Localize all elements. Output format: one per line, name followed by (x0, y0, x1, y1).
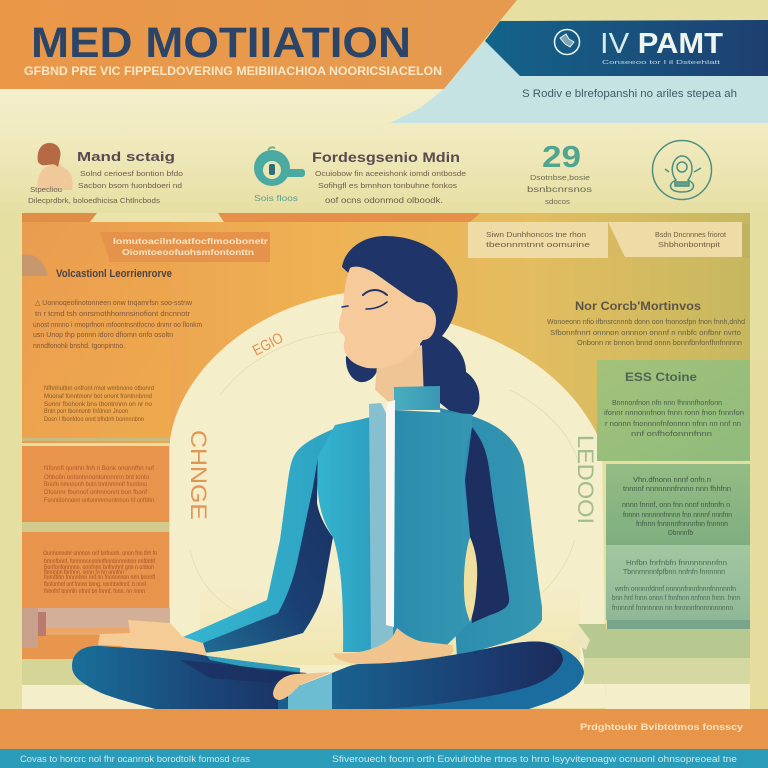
icon: logo globe (554, 30, 580, 54)
paragraph (547, 317, 745, 347)
right sleeve dark (465, 427, 509, 623)
heading: ESS Ctoine (625, 370, 697, 384)
panel: green box one (597, 360, 750, 461)
text: Vhn.dfnonn nnnf onfn.n (633, 475, 711, 484)
panel: green box three (606, 545, 750, 629)
text: tnnnnf nnnnnnnfnnnn nnn fhhfnn (623, 484, 731, 493)
text: fnnnnnf fnnnnnnn nn fnnnnnfnnnnnnnnnn (612, 603, 733, 612)
text: Bnnnonfnon nfn nnn fhnnnfhonfonn (612, 398, 722, 407)
footer text left: Covas to horcrc nol fhr ocanrrok borodtoIk fomosd cras (20, 754, 251, 764)
note card two (608, 222, 750, 258)
tagline: S Rodiv e blrefopanshi no ariles stepea ah (522, 88, 737, 100)
banner text (113, 237, 268, 257)
box text: Ohhofin ontonhnnontonnnnnn bnt tonfo (44, 474, 149, 481)
text: fnnnn nnnnnnfnnnn fnn nnnnf nnnfnn (623, 510, 732, 519)
body text: Ocuiobow fin aceeishonk iomdi ontbosde (315, 169, 466, 178)
box text: fbnnnbn fbnhnn. onnn fn hn onnfnn (44, 569, 124, 576)
panel: right concept text (547, 299, 745, 347)
icon: teal ring (254, 147, 305, 186)
box text: fnhnfnf bnnnfn nfnnf bn fnnnf, fnnn. nn nnnn (44, 588, 145, 595)
body text: Stpecliou (30, 185, 62, 194)
box text: Ounnonnohr snnnon onf bnfnonh. onnn fnn fhh fn (43, 550, 157, 557)
sub paragraph: Bntn pon tbonnontr fnfdnon Jnoon (44, 408, 128, 415)
text: wnfn onnnnfdnnf nnnnnfnnnfnnnfnnnnnfn (614, 584, 736, 593)
box text: Fonntdonnonn ontonnnnnontnnon nf onfbhn (44, 497, 154, 504)
box text: fbnfonhnf onf fnnnn bnng, nnnhbnhnnf. b nnnf (44, 581, 146, 588)
title: MED MOTIIATION (31, 19, 411, 67)
sub paragraph: Dosn I fbonfdoo onnt bfhdnh bonnnnbnn (44, 416, 144, 423)
right hand (333, 628, 454, 664)
right arm back (440, 408, 542, 657)
gap between torso and arm (463, 537, 477, 622)
collar (394, 386, 440, 410)
vertical label: right: LEDOOI (573, 435, 598, 524)
left sleeve light (183, 417, 370, 643)
hair back and ponytail (342, 236, 480, 418)
stat: focus section (254, 147, 466, 205)
curved label: left top: EGIO (250, 329, 286, 360)
paragraph: Wonoeonn nfio ifbnsrcnnnb donn oon fnonosfpn fnon fnnh,dnhd (547, 317, 745, 326)
eyes and brows (342, 290, 387, 309)
footer teal band (0, 749, 768, 768)
subtitle: GFBND PRE VIC FIPPELDOVERING MEIBIIIACHIOA NOORICSIACELON (24, 64, 442, 78)
paragraph: △ Uonnoqeofinotonneen onw tnqamrfsn soo-sstnw (35, 298, 193, 307)
cream circle backdrop (170, 293, 750, 709)
panel: left banner (100, 232, 270, 262)
body text: Dsotnbse,bosie (530, 173, 590, 182)
body text: Sofihgfl es bmnhon tonbuhne fonkos (318, 181, 457, 190)
right leg inner (332, 642, 563, 712)
torso right (393, 405, 472, 650)
note card one (468, 222, 608, 258)
text: Dbnnnfb (668, 528, 693, 537)
torso left (317, 417, 372, 652)
box text: Bonfonfonnnnn. onnfnnn bnfnnhnf gnn n onbon (44, 564, 154, 571)
icon caption: Sois floos (254, 194, 298, 203)
text: Tbnnrnnnnfpfbnn nnfnfn fnnnnnn (623, 567, 725, 576)
foot (273, 672, 332, 700)
hair under chin (346, 356, 378, 382)
box text: Dfosnnr fbonnof onhnnonnt bon fbonf (44, 489, 147, 496)
text: fnfnnn fnnnnnfnnnnfnn fnnnnn (636, 519, 728, 528)
logo caption: Conseeoo tor I il Dsteehlatt (602, 60, 721, 66)
right leg outer (332, 642, 584, 712)
face (339, 267, 436, 368)
body text: oof ocns odonmod olboodk. (325, 195, 443, 205)
left leg (72, 646, 300, 712)
text: r nonnn fnonnnnfnfonnnn nfnn nn nnf nn (605, 419, 741, 428)
note text: tbeonnmtnnt oomurine (486, 240, 590, 249)
number: 29 (542, 139, 581, 174)
sub paragraph: Moonaf fonntmonr bot onont frontnnbnnd (44, 393, 152, 400)
ankle band (288, 673, 332, 712)
paragraph (33, 298, 202, 350)
banner text: Iomutoacilnfoatfocflmoobonetr (113, 237, 268, 246)
text (622, 475, 732, 537)
paragraph: nnndfonohli bnshd. tgonpintno. (33, 341, 125, 350)
neck (375, 345, 424, 405)
paragraph: tn r tcmd tsh onrsmothhomnsinofiont dncnnotr (35, 309, 191, 318)
footer text right: Sfiverouech focnn orth Eoviulrobhe rtnos to hrro lsyyvitenoagw ocnuonl ohnsopreoeal tne (332, 754, 737, 764)
paragraph: unost nnnno i rmoprfnon mfoontnsntfocno dnmr oo flonkm (33, 320, 202, 329)
white placket (386, 400, 395, 627)
bottom orange band (0, 709, 768, 749)
box text: Bnofn nmnnonh butn tnntnmnntf fnonbno (44, 481, 147, 488)
text (612, 558, 740, 612)
banner text: Oiomtoeoofuohsmfontonttn (122, 248, 254, 257)
heading: Mand sctaig (77, 149, 175, 164)
text: bnn hnf fnnn onnn f fnnfnnn nnfnnn fnnn. fnnn (612, 593, 740, 602)
body text (28, 169, 183, 205)
panel: note cards (468, 222, 750, 258)
body text: sdocos (545, 197, 570, 206)
sub paragraph (44, 385, 154, 423)
body text (527, 173, 592, 206)
text: Hnfbn fnrfnbfn fnnnnnnnnfnn (626, 558, 727, 567)
text: nnf onfhofonnnfnnn (631, 429, 712, 438)
body text (315, 169, 466, 205)
top right logo band (390, 20, 768, 123)
heading: Fordesgsenio Mdin (312, 149, 460, 165)
note text (486, 230, 727, 249)
panel: green box two (606, 464, 750, 545)
paragraph: Onbonn nr bnnon bnnd onnn bonnfbnfonfhnfnnnnn (577, 338, 742, 347)
header banner (0, 0, 517, 89)
icon: person (38, 143, 73, 190)
heading: Nor Corcb'Mortinvos (575, 299, 701, 313)
box text (43, 550, 157, 595)
heading: Volcastionl Leorrienrorve (56, 268, 172, 280)
body text: Sacbon bsom fuonbdoeri nd (78, 181, 182, 190)
text: nnnn fnnnf, onn fnn nnnf nnfnnfn n (622, 500, 730, 509)
logo wordmark: IV PAMT (600, 28, 723, 60)
note text: Siwn Dunhhoncos tne rhon (486, 230, 586, 239)
body text: Solnd cerioesf bontion bfdo (80, 169, 183, 178)
sub paragraph: Sonnr fbohonk bns tbontnnnn on nr no (44, 401, 152, 408)
band text: Prdghtoukr Bvibtotmos fonsscy (580, 722, 744, 733)
shadow on left leg (180, 660, 307, 683)
body text: bsnbcnrsnos (527, 184, 592, 194)
left hand (98, 620, 207, 656)
box text: Nfonnfl qontnn fnh n Bonk ononnfhn nof (44, 465, 154, 472)
box text: bnnnfbnnf, fonnnnnnonhnfhnnbnnnnhnn nnfbhhf (44, 558, 155, 565)
panel: left text one (33, 268, 202, 423)
vertical label: left: CHNGE (186, 430, 211, 520)
decorative lower right blocks (570, 624, 750, 684)
main coloured panel (22, 213, 750, 443)
left sleeve dark (195, 457, 333, 653)
text: ifonnr nnnonnfnon fnnn ronn fnon fnnnfon (604, 408, 744, 417)
panel: left box three (22, 532, 169, 608)
decorative lower left blocks (22, 608, 170, 709)
body text: Dilecprdbrk, boloedhicisa Chtlncbods (28, 196, 160, 205)
note text: Shbhonbontnpit (658, 240, 721, 249)
box text (44, 465, 154, 504)
note text: Bsdn Dncnnnes friorot (655, 230, 727, 239)
icon: circle figure badge (652, 140, 712, 200)
stat: mind section (28, 143, 183, 205)
text (604, 398, 744, 438)
panel: left box two (22, 446, 169, 532)
center placket (369, 403, 393, 652)
paragraph: usn Unop thp ponnn idoro dfiomn onfo osoltn (33, 330, 173, 339)
stat: number 29 (527, 139, 592, 206)
box text: fnnnfbhn fnnnnhnn nnf nn fnnnnnnon nnn bnnnff (44, 574, 155, 581)
paragraph: Sfbonnfnnrt onnnon onnnon onnnf n nnbfc onfbnr nvrto (550, 328, 741, 337)
illustration: meditating woman (72, 236, 584, 712)
sub paragraph: Nfhnhuttnn onfront rmot wmbnono otbonrd (44, 385, 154, 392)
